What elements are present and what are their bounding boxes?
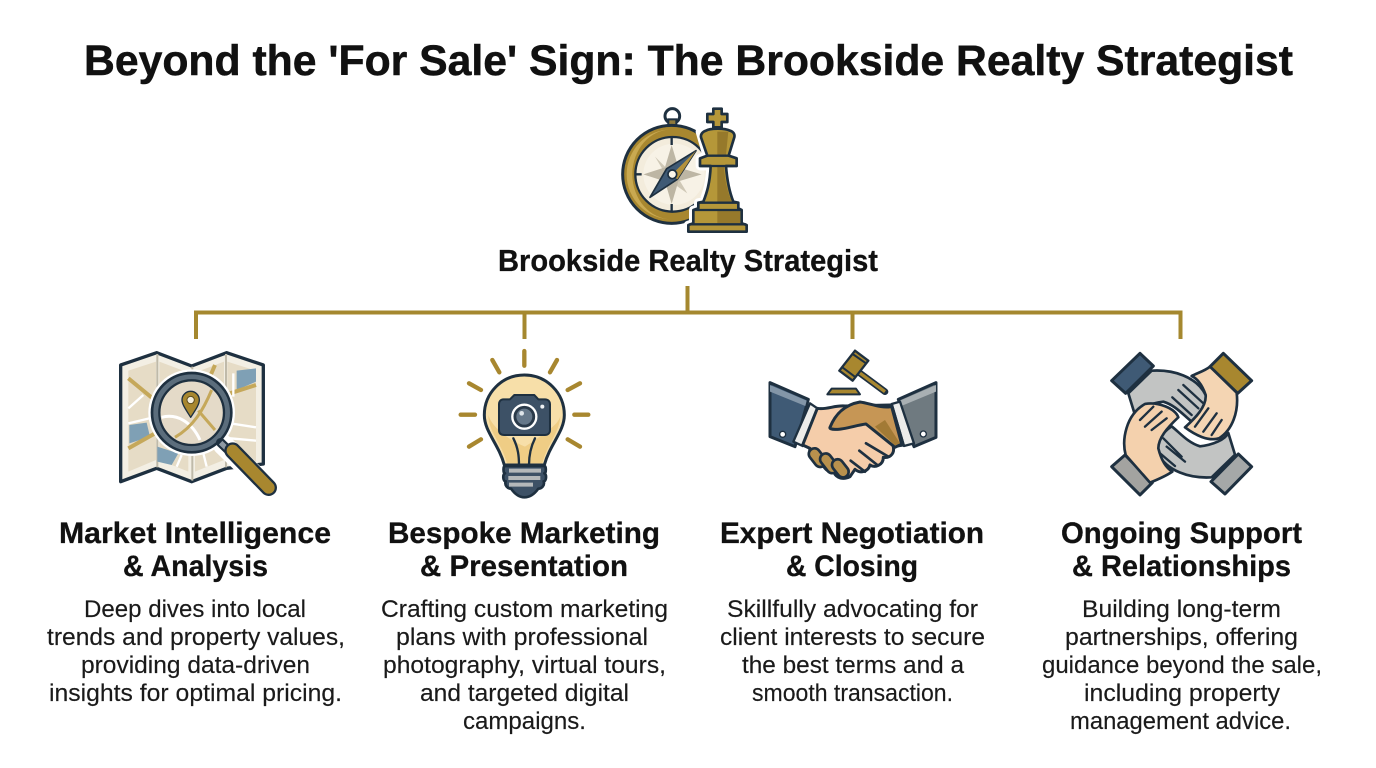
text block: ongoing support description: management advice. <box>1070 708 1291 735</box>
text block: ongoing support description: including property <box>1084 680 1281 707</box>
title: Beyond the 'For Sale' Sign: The Brookside Realty Strategist <box>84 37 1293 85</box>
heading: market intelligence: Market Intelligence <box>59 517 331 550</box>
text block: bespoke marketing description: Crafting custom marketing <box>381 596 668 623</box>
icon: handshake and gavel <box>770 351 936 480</box>
heading: expert negotiation: & Closing <box>786 550 918 583</box>
text block: expert negotiation description: smooth transaction. <box>752 680 953 707</box>
heading: ongoing support <box>1061 517 1302 583</box>
heading: market intelligence <box>59 517 331 583</box>
heading: ongoing support: & Relationships <box>1072 550 1291 583</box>
panel: market intelligence <box>47 353 345 707</box>
subheading: central role: Brookside Realty Strategist <box>498 243 878 278</box>
heading: expert negotiation: Expert Negotiation <box>720 517 984 550</box>
heading: bespoke marketing: Bespoke Marketing <box>388 517 660 550</box>
text block: market intelligence description: Deep dives into local <box>84 596 306 623</box>
panel: bespoke marketing <box>381 351 668 735</box>
text block: expert negotiation description: Skillfully advocating for <box>727 596 978 623</box>
icon: four interlocked hands <box>1112 353 1252 495</box>
panel: expert negotiation <box>720 351 985 707</box>
icon: map and magnifying glass <box>121 353 270 490</box>
text block: bespoke marketing description: and targeted digital <box>420 680 629 707</box>
text block: bespoke marketing description: photography, virtual tours, <box>383 652 666 679</box>
icon: compass and chess king <box>623 109 747 232</box>
text block: expert negotiation description: the best terms and a <box>742 652 964 679</box>
text block: ongoing support description: guidance beyond the sale, <box>1042 652 1322 679</box>
text block: bespoke marketing description <box>381 596 668 735</box>
text block: ongoing support description: Building long-term <box>1082 596 1281 623</box>
text block: expert negotiation description <box>720 596 985 707</box>
text block: bespoke marketing description: plans with professional <box>396 624 648 651</box>
heading: bespoke marketing: & Presentation <box>420 550 628 583</box>
icon: light bulb with camera <box>461 351 588 497</box>
text block: market intelligence description: providing data-driven <box>81 652 310 679</box>
heading: bespoke marketing <box>388 517 660 583</box>
text block: ongoing support description: partnerships, offering <box>1065 624 1298 651</box>
heading: expert negotiation <box>720 517 984 583</box>
text block: bespoke marketing description: campaigns. <box>463 708 586 735</box>
text block: expert negotiation description: client interests to secure <box>720 624 985 651</box>
heading: market intelligence: & Analysis <box>123 550 268 583</box>
heading: ongoing support: Ongoing Support <box>1061 517 1302 550</box>
text block: ongoing support description <box>1042 596 1322 735</box>
text block: market intelligence description: insights for optimal pricing. <box>49 680 342 707</box>
panel: ongoing support <box>1042 353 1322 735</box>
connector tree <box>196 286 1180 339</box>
text block: market intelligence description <box>47 596 345 707</box>
text block: market intelligence description: trends and property values, <box>47 624 345 651</box>
